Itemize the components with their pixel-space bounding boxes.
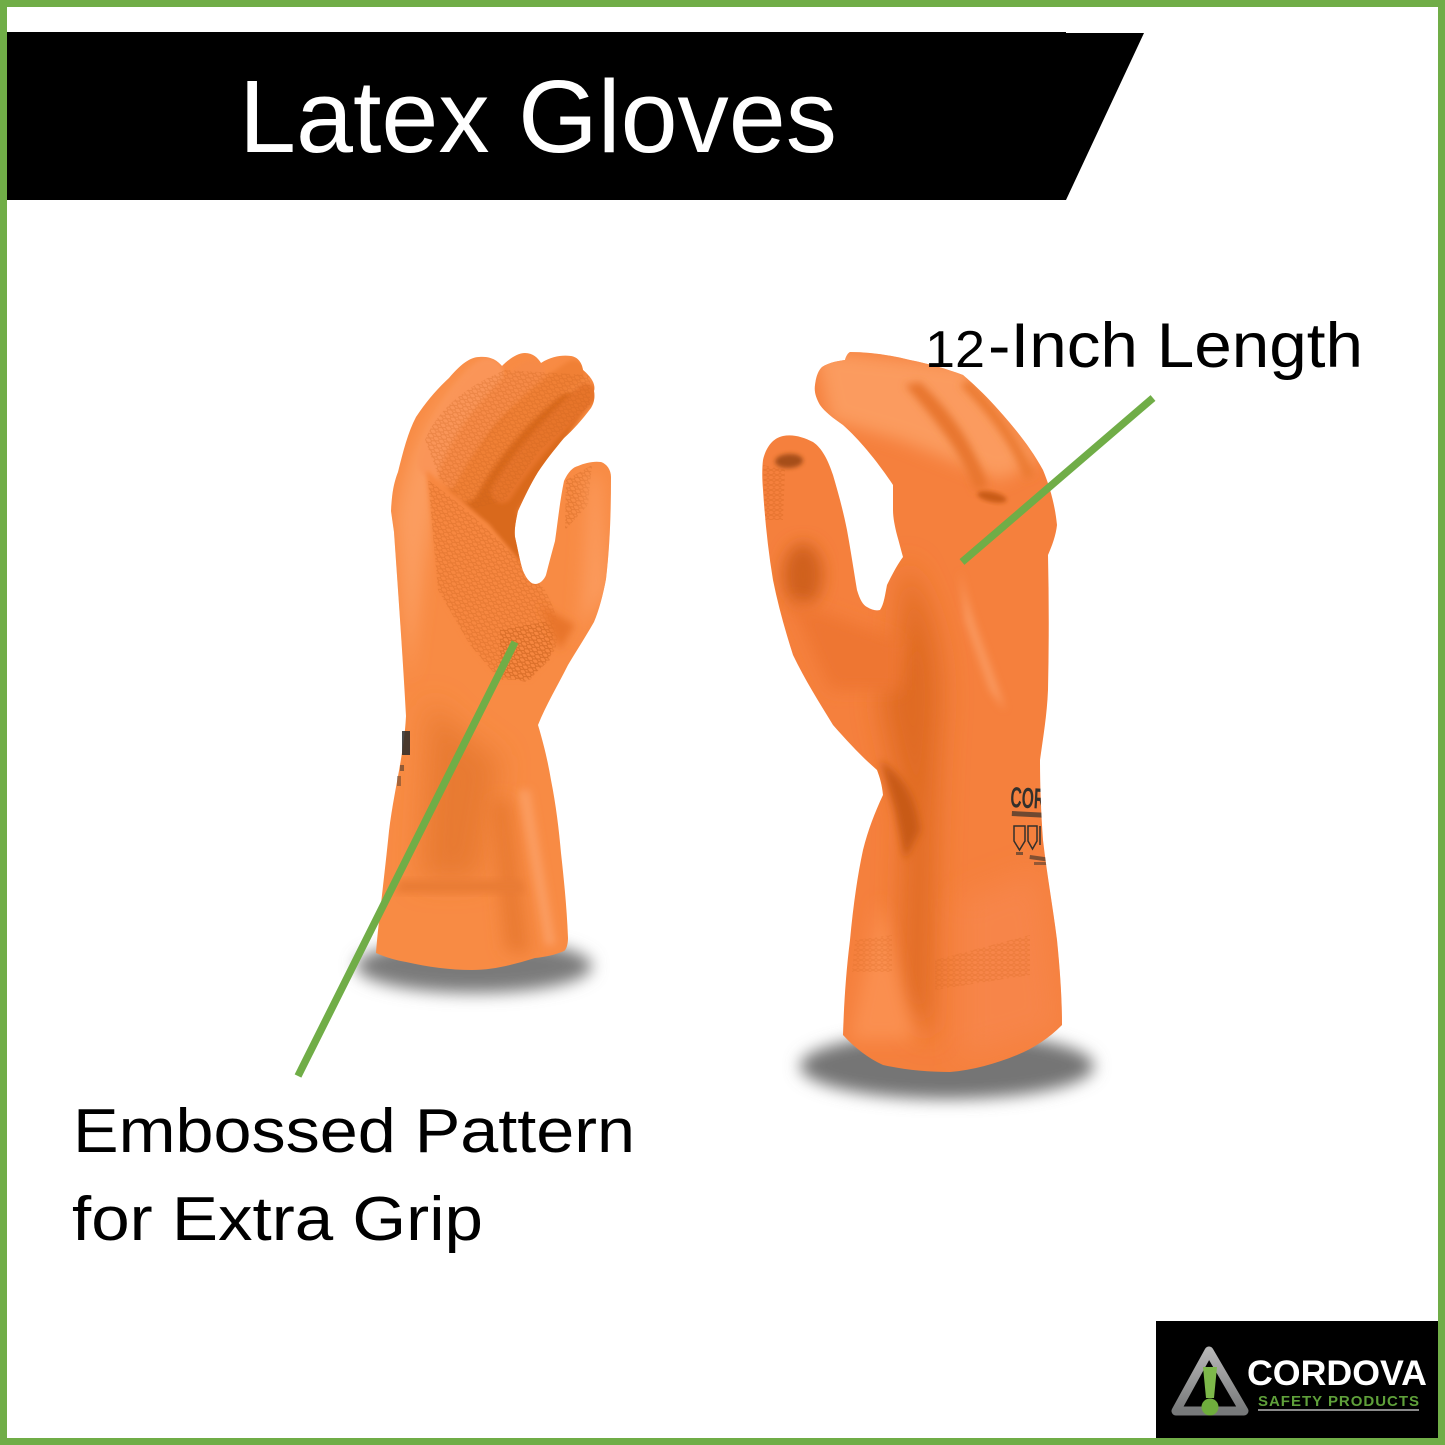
callout line: 12-inch length — [962, 398, 1153, 562]
wrist brand print — [1011, 787, 1046, 865]
logo wordmark: CORDOVA — [1247, 1354, 1427, 1393]
palm — [425, 472, 538, 584]
label line two: for Extra Grip — [72, 1185, 483, 1254]
cuff grip pattern — [942, 935, 1030, 988]
finger grip pattern — [425, 370, 590, 510]
callout label: 12-inch length: -Inch Length — [988, 311, 1363, 381]
wrist brand print: CORD — [1010, 782, 1057, 816]
callout label: 12-inch length: 12 — [925, 321, 985, 379]
embossed grip pattern on palm — [428, 480, 558, 680]
callout label: embossed pattern for extra grip — [72, 1097, 635, 1254]
banner shape — [7, 32, 1144, 200]
right glove floor shadow — [800, 1033, 1094, 1099]
logo underline — [1258, 1409, 1419, 1411]
icon: warning triangle — [1176, 1351, 1244, 1416]
fingers — [433, 372, 586, 492]
logo background — [1156, 1321, 1438, 1438]
title banner — [7, 32, 1144, 200]
left glove floor shadow — [356, 939, 592, 993]
callout line: embossed pattern — [298, 642, 515, 1076]
thumb grip pattern — [565, 465, 592, 530]
left glove with shadow — [356, 340, 630, 993]
label line one: Embossed Pattern — [73, 1097, 635, 1166]
left glove wrist print — [397, 731, 410, 786]
logo: Cordova Safety Products — [1156, 1321, 1438, 1438]
finger cavity — [448, 392, 585, 568]
thumb tip dimple — [775, 453, 803, 469]
left glove body — [376, 353, 611, 970]
logo tagline: SAFETY PRODUCTS — [1258, 1393, 1419, 1410]
title: Latex Gloves — [239, 59, 837, 174]
right glove with shadow — [750, 340, 1094, 1099]
right glove body — [762, 352, 1062, 1072]
